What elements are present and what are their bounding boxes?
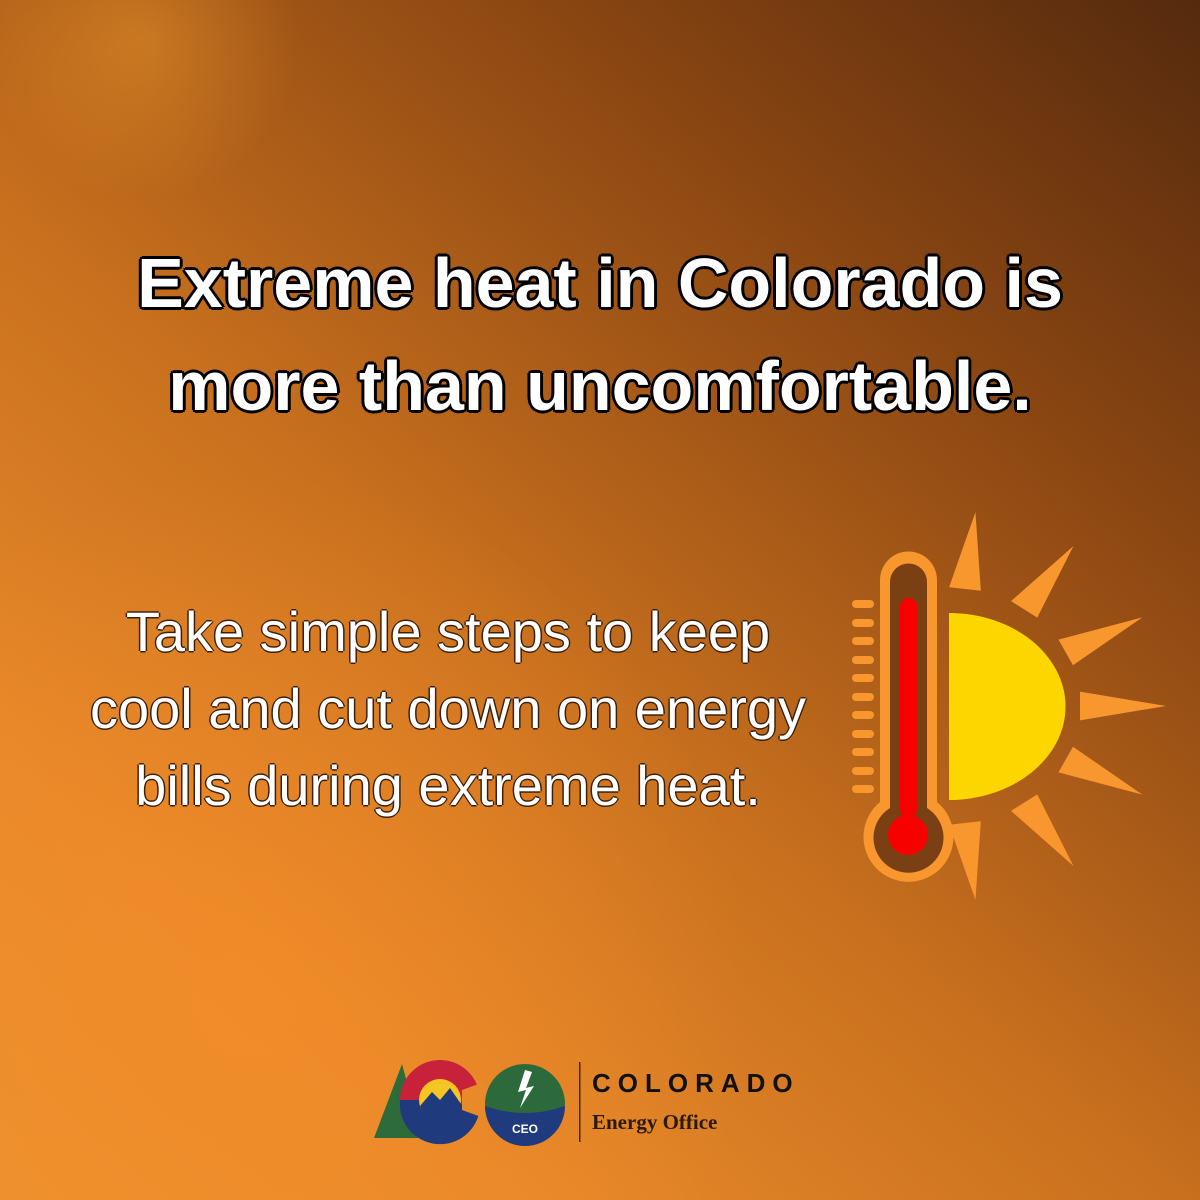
logo text: COLORADO [592,1068,800,1098]
tree [374,1064,422,1138]
title [137,244,1063,425]
title: Extreme heat in Colorado is [137,244,1063,322]
logo: Colorado Energy Office: CEO [512,1122,538,1136]
subtitle text [90,600,808,818]
logo: Colorado Energy Office [374,1060,800,1146]
CEO circle [485,1064,565,1144]
logo: Colorado Energy Office: Energy Office [592,1110,717,1134]
title: more than uncomfortable. [168,347,1032,425]
ticks [852,600,874,793]
C mark [400,1060,480,1140]
thermometer outline [864,552,954,882]
mercury [900,598,917,818]
sun rays [949,510,1166,902]
subtitle text: Take simple steps to keep [126,600,770,663]
subtitle text: cool and cut down on energy [90,677,806,740]
subtitle text: bills during extreme heat. [135,754,761,817]
sun half disc [949,613,1066,800]
